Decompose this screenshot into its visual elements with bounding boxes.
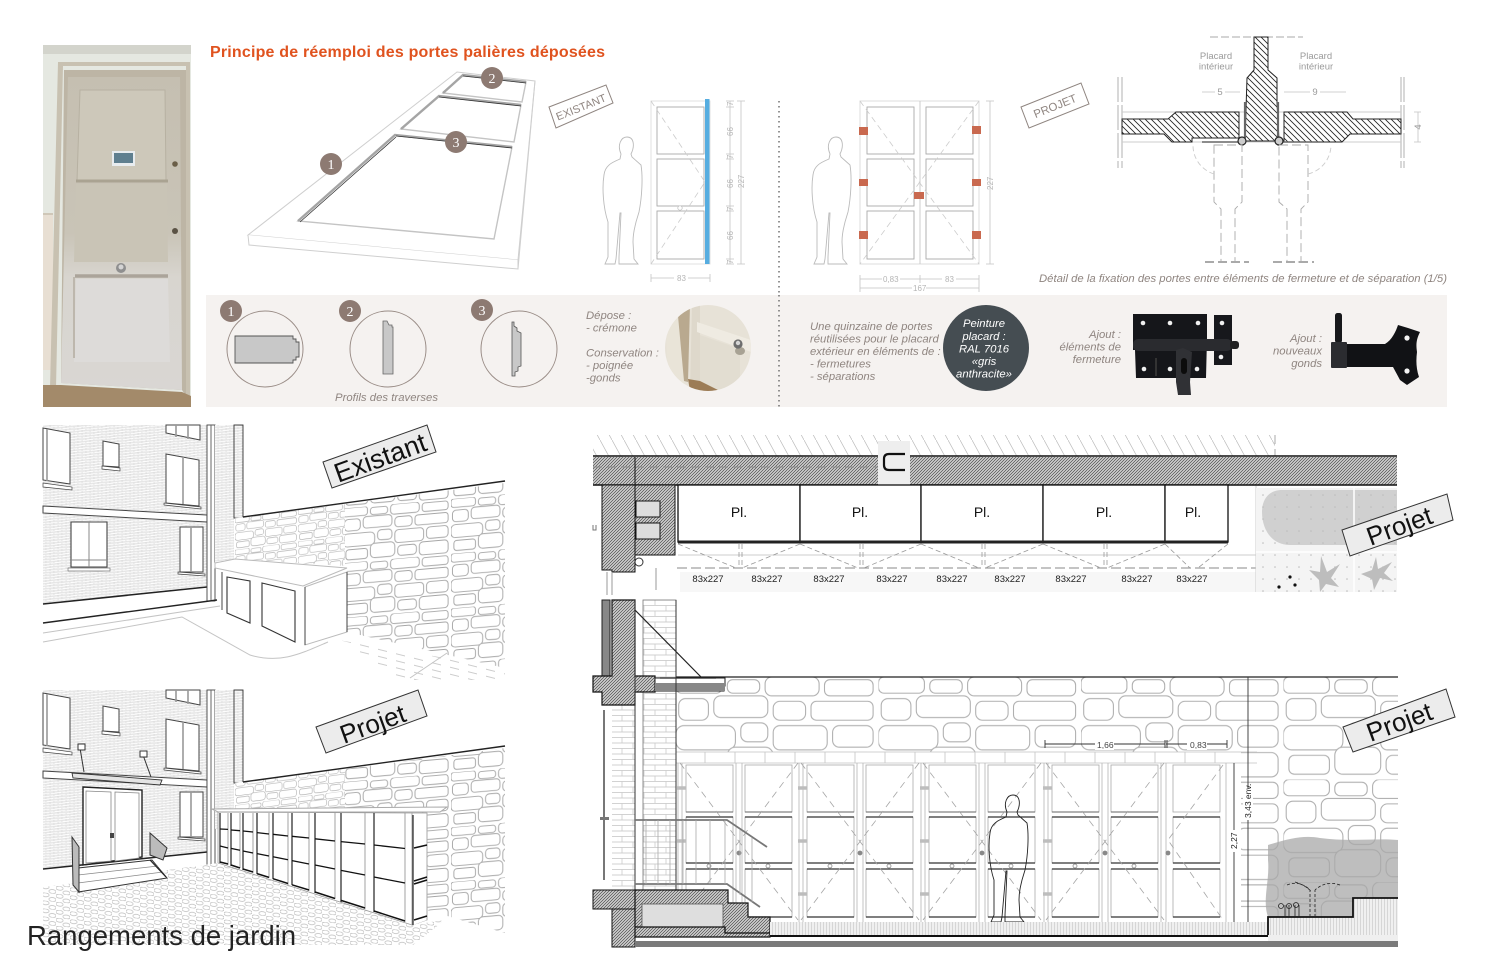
wall band: [593, 457, 1397, 485]
door sizes: 83x227: [813, 574, 845, 585]
anthracite paint swatch: [943, 305, 1029, 391]
door sizes: 83x227: [876, 574, 908, 585]
elevation: existing door: 7: [726, 259, 735, 264]
label: projet elevation: [1343, 689, 1455, 752]
title: Principe de réemploi des portes palières déposées: [210, 44, 605, 61]
stamp: existant: [549, 85, 613, 128]
stamp: projet: PROJET: [1032, 93, 1079, 121]
profile 1: [220, 300, 303, 387]
text: ajout gonds: gonds: [1291, 358, 1322, 370]
label: placard left: intérieur: [1199, 62, 1233, 72]
canopy and tie rods: [72, 744, 162, 785]
last single door: [1161, 763, 1226, 922]
stone wall: [235, 504, 345, 566]
anthracite paint swatch: «gris: [972, 356, 997, 368]
label: existant: Existant: [330, 427, 431, 488]
text: ajout gonds: Ajout :: [1290, 333, 1322, 345]
profile 3: 3: [478, 304, 486, 319]
elevation: existing door: 83: [677, 274, 686, 283]
dimension lines: 1,66: [1097, 740, 1114, 750]
number badge 3: [445, 131, 467, 153]
floor plan: [593, 435, 1397, 595]
garden: [1256, 488, 1397, 592]
stone wall: [235, 769, 345, 811]
text: quinzaine de portes: extérieur en éléments de :: [810, 346, 941, 358]
text: ajout gonds: nouveaux: [1273, 346, 1322, 358]
label: placard left: Placard: [1200, 51, 1232, 62]
small plants: [1278, 882, 1340, 917]
labels Pl.: Pl.: [1096, 504, 1112, 520]
text: quinzaine de portes: Une quinzaine de portes: [810, 321, 932, 333]
niche: [878, 441, 910, 485]
dimension lines: 0,83: [1190, 740, 1207, 750]
photo: door handle detail: [665, 305, 751, 391]
anthracite paint swatch: RAL 7016: [959, 344, 1010, 356]
elevation: existing door: 66: [726, 127, 735, 136]
elevation: existing door: 7: [726, 101, 735, 106]
cupboard modules: [678, 485, 1228, 542]
elevation: project double door: 83: [945, 275, 954, 284]
entrance door: [83, 787, 142, 865]
door sizes: 83x227: [692, 574, 724, 585]
stamp: existant: EXISTANT: [555, 92, 608, 123]
elevation: project double door: [812, 101, 995, 293]
dimension lines: [1045, 677, 1253, 922]
railing: [635, 820, 767, 907]
profiles caption: Profils des traverses: [335, 392, 438, 404]
door sizes: 83x227: [1176, 574, 1208, 585]
text: quinzaine de portes: - fermetures: [810, 358, 871, 370]
elevation: project double door: 0,83: [883, 275, 899, 284]
axonometric door diagram: [248, 67, 535, 269]
labels Pl.: [731, 504, 1201, 520]
labels Pl.: Pl.: [1185, 504, 1201, 520]
text: dépose and conservation: Dépose :: [586, 310, 631, 322]
section detail: door fixing: 9: [1312, 87, 1318, 98]
stone wall: [676, 677, 1398, 935]
elevation: existing door: 227: [737, 174, 746, 188]
number badge 2: [481, 67, 503, 89]
text: dépose and conservation: Conservation :: [586, 348, 659, 360]
text: dépose and conservation: - crémone: [586, 322, 637, 334]
detail caption: Détail de la fixation des portes entre éléments de fermeture et de séparation (1/5): [1039, 273, 1447, 285]
profile circles: [220, 299, 557, 404]
labels Pl.: Pl.: [731, 504, 747, 520]
ground strips: [770, 922, 1268, 935]
label: projet plan: [1342, 494, 1453, 556]
section detail: door fixing: 4: [1413, 124, 1424, 130]
profile 1: 1: [228, 305, 234, 320]
steps and railings: [72, 833, 167, 892]
profile 2: [339, 300, 426, 387]
elevation: project double door: 227: [986, 176, 995, 190]
elevation: existing door: 7: [726, 154, 735, 159]
text: dépose and conservation: - poignée: [586, 360, 633, 372]
profile 3: [471, 299, 557, 387]
hatched steps and foundations: [593, 890, 635, 909]
icon: black bolt latch: [1133, 314, 1239, 395]
text: quinzaine de portes: - séparations: [810, 371, 876, 383]
elevation: existing door: [603, 99, 746, 283]
profile 2: 2: [346, 305, 354, 320]
number badge 2: 2: [488, 72, 496, 87]
dimension lines: 2,27: [1229, 832, 1239, 849]
label: projet plan: Projet: [1362, 500, 1437, 552]
elevation: existing door: 66: [726, 231, 735, 240]
section detail: door fixing: 5: [1217, 87, 1223, 98]
grey shrub mass: [1266, 837, 1398, 917]
text: ajout fermeture: Ajout :: [1089, 329, 1121, 341]
label: placard right: intérieur: [1299, 62, 1333, 72]
anthracite paint swatch: Peinture: [963, 318, 1005, 330]
orange hinges and latch: [859, 126, 981, 239]
perspective: project courtyard: [43, 690, 505, 945]
door sizes: 83x227: [751, 574, 783, 585]
dimension lines: 3,43 env.: [1243, 784, 1253, 818]
door sizes: 83x227: [1121, 574, 1153, 585]
number badge 1: 1: [328, 158, 334, 173]
ground lines: [43, 600, 217, 623]
anthracite paint swatch: anthracite»: [956, 368, 1012, 380]
text: ajout fermeture: fermeture: [1073, 354, 1121, 366]
storage box: [215, 559, 347, 645]
stamp: projet: [1021, 83, 1089, 128]
labels Pl.: Pl.: [852, 504, 868, 520]
label: projet perspective: Projet: [336, 698, 410, 750]
text: dépose and conservation: -gonds: [586, 372, 621, 384]
text: quinzaine de portes: réutilisées pour le placard: [810, 334, 939, 346]
text: ajout fermeture: éléments de: [1059, 342, 1121, 354]
door sizes: [692, 574, 1208, 585]
elevation: existing door: 66: [726, 179, 735, 188]
dotted separator: [778, 101, 780, 407]
left building section: [593, 600, 770, 947]
label: projet elevation: Projet: [1362, 696, 1437, 748]
number badge 1: [320, 153, 342, 175]
door sizes: 83x227: [994, 574, 1026, 585]
person silhouette: [989, 795, 1028, 922]
anthracite paint swatch: placard :: [961, 331, 1006, 343]
column and cupboard end: [602, 485, 675, 572]
label: placard right: Placard: [1300, 51, 1332, 62]
door sizes: 83x227: [936, 574, 968, 585]
icon: black hinge: [1331, 313, 1420, 385]
elevation: garden wall with cupboards: [593, 600, 1398, 947]
beige band: [206, 295, 1447, 407]
perspective: existing courtyard: [43, 425, 505, 680]
label: projet perspective: [316, 690, 427, 753]
heading: rangements de jardin: Rangements de jardin: [27, 920, 296, 951]
photo: existing landing door: [43, 45, 191, 407]
labels Pl.: Pl.: [974, 504, 990, 520]
elevation: existing door: 7: [726, 206, 735, 211]
door sizes: 83x227: [1055, 574, 1087, 585]
number badge 3: 3: [452, 136, 460, 151]
elevation: project double door: 167: [913, 284, 927, 293]
dotted separator over band: [778, 295, 780, 407]
reused doors cupboard: [212, 807, 447, 925]
cobbled ground: [43, 863, 445, 945]
cupboard front: [676, 752, 1241, 922]
section detail: door fixing: [1118, 37, 1424, 262]
